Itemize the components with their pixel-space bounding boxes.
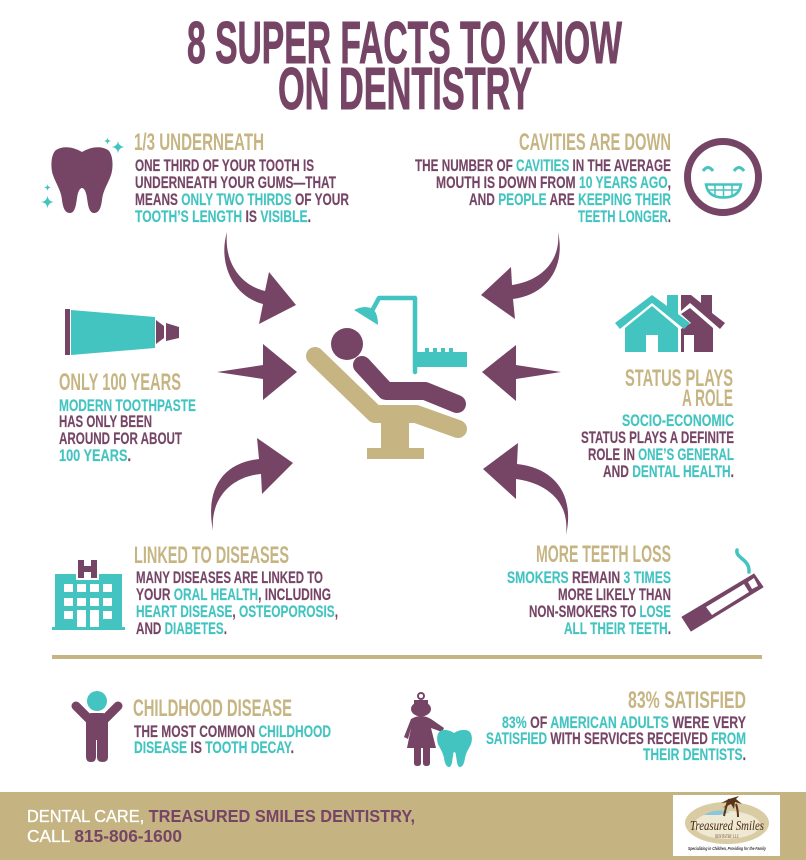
text block: AND DENTAL HEALTH. <box>603 462 734 481</box>
text block <box>581 411 734 481</box>
icon: tooth with sparkles <box>41 138 124 213</box>
text block: ROLE IN ONE’S GENERAL <box>588 445 734 464</box>
footer band <box>0 792 806 860</box>
heading: LINKED TO DISEASES <box>134 542 289 569</box>
icon: smiling face <box>688 142 758 212</box>
text block: STATUS PLAYS A DEFINITE <box>581 428 734 447</box>
panel: more teeth loss <box>507 541 763 638</box>
text block: THE MOST COMMON CHILDHOOD <box>134 722 331 741</box>
logo: Specializing in Children, Providing for the Family <box>688 846 766 851</box>
text block: MODERN TOOTHPASTE <box>59 396 196 415</box>
text block: TOOTH’S LENGTH IS VISIBLE. <box>135 207 311 226</box>
arrow: middle left <box>217 344 297 400</box>
heading: CHILDHOOD DISEASE <box>133 695 292 722</box>
icon: dental chair with patient <box>315 298 467 459</box>
text block <box>135 156 349 226</box>
icon: dentist with tooth <box>404 693 472 767</box>
text block <box>134 722 331 757</box>
title: ON DENTISTRY <box>278 56 532 122</box>
text block: ONE THIRD OF YOUR TOOTH IS <box>135 156 314 175</box>
footer text <box>27 806 415 846</box>
heading: 1/3 UNDERNEATH <box>134 129 264 156</box>
text block: THE NUMBER OF CAVITIES IN THE AVERAGE <box>415 156 671 175</box>
logo: DENTISTRY, LLC <box>715 835 739 840</box>
heading: MORE TEETH LOSS <box>536 541 671 568</box>
text block: AROUND FOR ABOUT <box>59 429 182 448</box>
text block <box>507 568 671 638</box>
icon: two houses <box>615 295 725 352</box>
panel: status plays a role <box>581 295 734 481</box>
footer text: DENTAL CARE, TREASURED SMILES DENTISTRY, <box>27 806 415 826</box>
heading <box>625 365 733 412</box>
text block: 83% OF AMERICAN ADULTS WERE VERY <box>502 713 746 732</box>
panel: only 100 years <box>59 309 196 465</box>
arrow: bottom left <box>211 438 293 531</box>
panel: 1/3 underneath <box>41 129 349 226</box>
text block <box>59 396 196 465</box>
text block: SATISFIED WITH SERVICES RECEIVED FROM <box>486 729 746 748</box>
arrow: middle right <box>482 345 561 401</box>
text block: UNDERNEATH YOUR GUMS—THAT <box>135 173 336 192</box>
heading: CAVITIES ARE DOWN <box>519 129 671 156</box>
logo <box>673 795 780 856</box>
heading: STATUS PLAYS <box>625 365 733 392</box>
text block: MEANS ONLY TWO THIRDS OF YOUR <box>135 190 349 209</box>
heading: A ROLE <box>682 385 733 412</box>
divider <box>52 655 762 659</box>
icon: child with raised arms <box>76 691 118 762</box>
text block: YOUR ORAL HEALTH, INCLUDING <box>136 585 331 604</box>
heading: 83% SATISFIED <box>628 687 746 714</box>
text block <box>415 156 671 226</box>
text block: SMOKERS REMAIN 3 TIMES <box>507 568 671 587</box>
panel: linked to diseases <box>52 542 338 638</box>
icon: hospital building <box>52 558 125 630</box>
text block: MOUTH IS DOWN FROM 10 YEARS AGO, <box>436 173 671 192</box>
icon: cigarette with smoke <box>682 550 763 631</box>
arrow: top right <box>481 232 560 319</box>
text block: HEART DISEASE, OSTEOPOROSIS, <box>136 602 338 621</box>
panel: 83% satisfied <box>404 687 746 767</box>
arrow: top left <box>224 232 296 324</box>
text block: DISEASE IS TOOTH DECAY. <box>134 738 294 757</box>
text block: MORE LIKELY THAN <box>558 585 671 604</box>
text block: SOCIO-ECONOMIC <box>622 411 734 430</box>
panel: childhood disease <box>76 691 331 762</box>
title <box>187 10 622 122</box>
panel: cavities are down <box>415 129 758 226</box>
text block <box>486 713 746 764</box>
text block: AND PEOPLE ARE KEEPING THEIR <box>469 190 671 209</box>
text block: AND DIABETES. <box>136 619 227 638</box>
text block: MANY DISEASES ARE LINKED TO <box>136 568 323 587</box>
text block: TEETH LONGER. <box>578 207 671 226</box>
text block: ALL THEIR TEETH. <box>564 619 671 638</box>
text block: NON-SMOKERS TO LOSE <box>529 602 671 621</box>
text block: HAS ONLY BEEN <box>59 412 152 431</box>
icon: toothpaste tube <box>65 309 179 355</box>
arrow: bottom right <box>483 443 568 535</box>
text block <box>136 568 338 638</box>
text block: THEIR DENTISTS. <box>643 745 746 764</box>
heading: ONLY 100 YEARS <box>59 369 181 396</box>
text block: 100 YEARS. <box>59 446 131 465</box>
logo: Treasured Smiles <box>690 819 764 834</box>
footer text: CALL 815-806-1600 <box>27 826 182 846</box>
